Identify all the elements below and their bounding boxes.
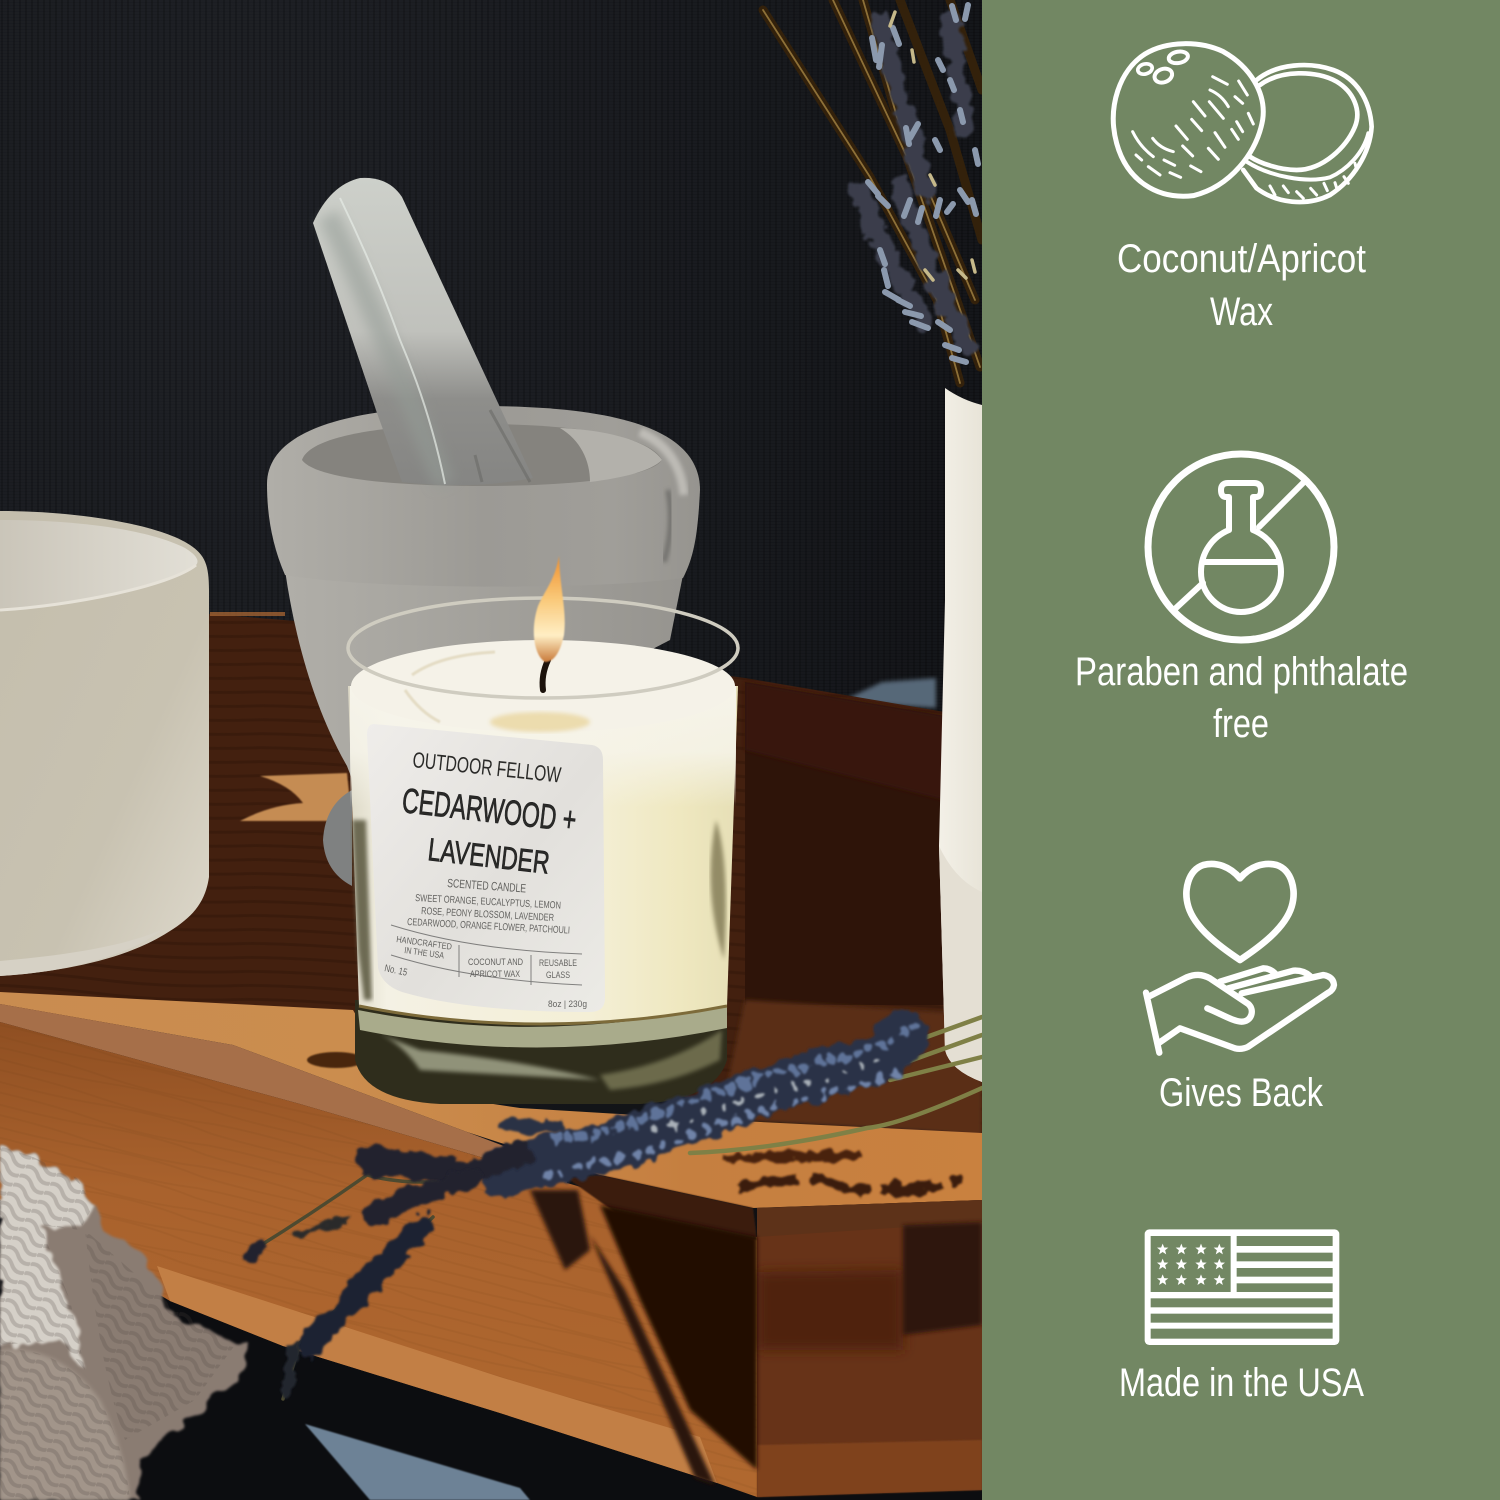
wooden tray: [0, 610, 982, 1497]
label ingredients: CEDARWOOD, ORANGE FLOWER, PATCHOULI: [407, 917, 570, 937]
pestle: [313, 178, 533, 485]
label table: [383, 925, 587, 1010]
left glass refraction: [352, 820, 372, 1000]
right glass shadow: [711, 820, 726, 960]
tray back rim highlight: [210, 612, 285, 616]
wax bottom edge: [359, 1006, 727, 1024]
candle: [348, 556, 738, 1104]
label table: HANDCRAFTED: [396, 934, 453, 952]
photo: candle scene: [0, 0, 982, 1500]
label ingredients: [407, 893, 570, 937]
label: made in the usa: Made in the USA: [1119, 1361, 1364, 1405]
lower fabric with blue patch: [100, 1290, 982, 1500]
label: paraben free: Paraben and phthalate: [1075, 650, 1408, 694]
glass base: [355, 1000, 727, 1104]
label scent name: LAVENDER: [426, 831, 551, 881]
tray floor: [0, 610, 982, 1135]
stem shadows: [763, 0, 982, 383]
label scent name: [400, 781, 578, 881]
label table: GLASS: [546, 970, 570, 980]
mortar marble veins: [640, 432, 684, 495]
dark sprigs: [367, 1153, 520, 1172]
marble mortar: [267, 178, 700, 886]
lavender sprigs foreground: [250, 1017, 982, 1399]
mortar opening: [302, 424, 662, 486]
wax body: [348, 686, 738, 1024]
label: coconut wax: Wax: [1210, 290, 1273, 334]
dark bud masses: [860, 20, 965, 345]
flame: [534, 556, 565, 662]
sprig bud mass, blue: [500, 1035, 905, 1173]
candle label: [367, 724, 605, 1012]
label: paraben free: [1075, 650, 1408, 746]
corner shadow: [567, 1175, 757, 1240]
tray right inner wall: [745, 682, 945, 1005]
pale buds: [868, 5, 978, 362]
label brand: OUTDOOR FELLOW: [411, 747, 562, 788]
lavender bunch top: [763, 0, 982, 383]
white vase right: [939, 388, 982, 1082]
label table: No. 15: [383, 963, 408, 979]
front lip band: [0, 1004, 567, 1183]
label table: REUSABLE: [539, 958, 577, 968]
small top sprig: [505, 1125, 560, 1128]
icon: coconut: [1113, 44, 1372, 202]
tray left face: [0, 1022, 757, 1497]
icon: no chemicals flask: [1148, 454, 1334, 640]
knitted towel: [0, 1146, 250, 1500]
label table: APRICOT WAX: [470, 969, 520, 979]
panel: green features column: [982, 0, 1500, 1500]
wax top: [351, 640, 735, 732]
label scent name: CEDARWOOD +: [400, 781, 578, 840]
label subtitle: SCENTED CANDLE: [447, 876, 527, 896]
label ingredients: ROSE, PEONY BLOSSOM, LAVENDER: [421, 906, 554, 924]
label table: IN THE USA: [404, 945, 445, 961]
mortar body: [285, 570, 683, 800]
label: gives back: Gives Back: [1159, 1071, 1324, 1115]
label: coconut wax: Coconut/Apricot: [1117, 237, 1366, 281]
icon: american flag: [1145, 1229, 1339, 1345]
label table: COCONUT AND: [468, 957, 523, 967]
label ingredients: SWEET ORANGE, EUCALYPTUS, LEMON: [415, 893, 561, 912]
label: coconut wax: [1117, 237, 1366, 334]
sunlit floor patch: [240, 773, 352, 821]
stem highlights: [763, 0, 980, 383]
dark fabric backdrop: [0, 0, 982, 1500]
mortar foot: [323, 790, 352, 886]
white cup left: [0, 511, 209, 976]
tray right face: [757, 1200, 982, 1497]
wood knot: [307, 1052, 365, 1068]
mortar rim: [267, 406, 700, 587]
wick: [543, 660, 548, 690]
front rim sunlit top: [0, 992, 982, 1208]
sprig stems: [690, 1017, 982, 1153]
icon: heart and hand: [1146, 864, 1334, 1053]
glass rim: [348, 598, 738, 698]
label table: 8oz | 230g: [548, 999, 587, 1010]
sprig cast shadow: [740, 1179, 960, 1190]
tray lower strip: [157, 1266, 717, 1483]
label: paraben free: free: [1213, 702, 1269, 746]
